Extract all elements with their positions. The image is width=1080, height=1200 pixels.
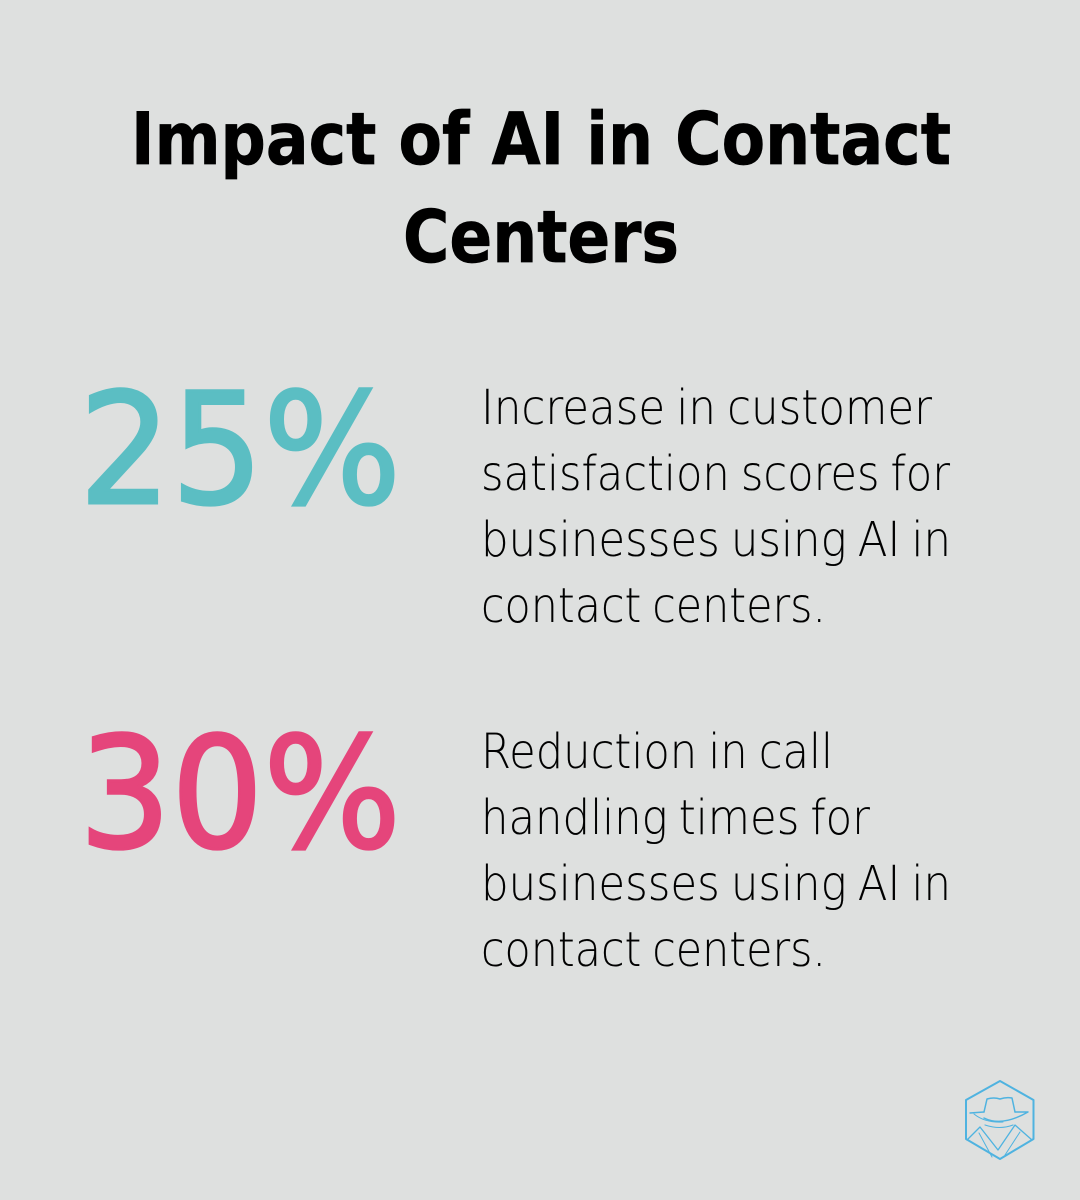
stat: 30%: 30% — [79, 705, 401, 884]
text block: customer satisfaction: Increase in customer — [481, 380, 932, 436]
text block: customer satisfaction: contact centers. — [481, 578, 826, 634]
title — [131, 97, 951, 279]
text block: call handling: businesses using AI in — [481, 856, 951, 912]
text block: customer satisfaction — [481, 380, 951, 634]
text block: call handling — [481, 724, 951, 978]
text block: customer satisfaction: satisfaction scores for — [481, 446, 950, 502]
text block: call handling: contact centers. — [481, 922, 826, 978]
icon: logo hexagon with hatted figure — [966, 1081, 1034, 1159]
title: Centers — [403, 195, 679, 279]
text block: customer satisfaction: businesses using AI in — [481, 512, 951, 568]
stat: 25%: 25% — [79, 361, 401, 540]
text block: call handling: handling times for — [481, 790, 870, 846]
title: Impact of AI in Contact — [131, 97, 951, 181]
text block: call handling: Reduction in call — [481, 724, 833, 780]
